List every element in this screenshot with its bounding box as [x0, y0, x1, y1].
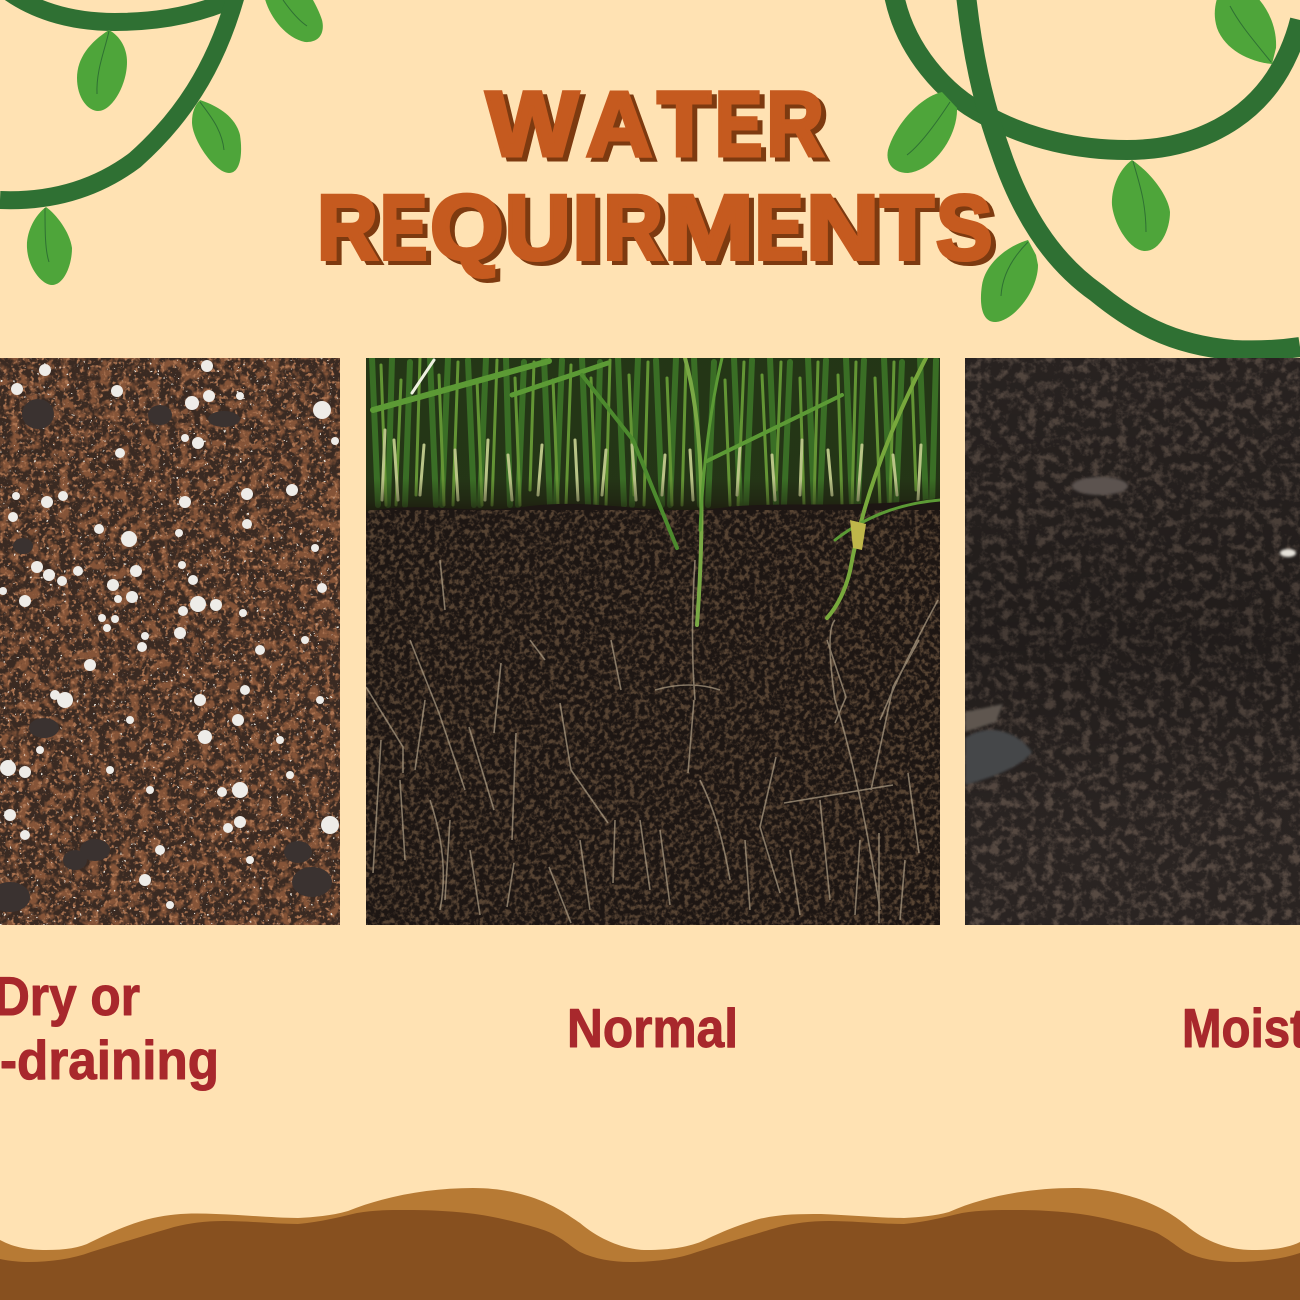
title: E	[720, 78, 767, 180]
title: T	[662, 78, 716, 180]
title: E	[760, 181, 808, 283]
title: T	[657, 74, 711, 176]
title: U	[510, 181, 576, 283]
title: Q	[430, 177, 504, 279]
title: S	[936, 177, 992, 279]
title: R	[766, 74, 824, 176]
perlite pieces	[0, 360, 339, 909]
vine: top right	[887, 0, 1300, 350]
leaves: top left	[27, 0, 323, 285]
title: W	[491, 78, 584, 180]
title: U	[505, 177, 571, 279]
title: E	[380, 177, 427, 279]
yellow leaf	[850, 520, 866, 550]
grass	[366, 358, 940, 513]
title: E	[755, 177, 803, 279]
title: N	[811, 181, 884, 283]
photo: normal soil with grass	[366, 358, 940, 925]
title: M	[663, 177, 754, 279]
grass stems and long blades	[373, 358, 940, 625]
photo: dry well-draining soil	[0, 358, 340, 925]
title: R	[603, 177, 663, 279]
stones	[965, 477, 1296, 785]
title: A	[591, 78, 657, 180]
title: W	[486, 74, 579, 176]
title: I	[577, 181, 605, 283]
title: S	[941, 181, 998, 283]
title: A	[586, 74, 652, 176]
vine: top left	[0, 0, 323, 285]
title: N	[806, 177, 879, 279]
dark stones	[0, 399, 332, 912]
ground: dark soil layer	[0, 1210, 1300, 1300]
roots	[366, 560, 938, 923]
labels	[0, 965, 1300, 1091]
title: R	[608, 181, 668, 283]
labels: Normal	[567, 997, 738, 1059]
title: R	[771, 78, 829, 180]
title: R	[322, 181, 383, 283]
title: Q	[435, 181, 509, 283]
title: E	[715, 74, 762, 176]
labels: -draining	[0, 1029, 219, 1091]
title: M	[668, 181, 759, 283]
title: E	[385, 181, 432, 283]
title: T	[885, 181, 939, 283]
ground: light soil layer	[0, 1188, 1300, 1300]
soil body	[380, 498, 940, 510]
photo: moist soil	[965, 358, 1300, 925]
title: R	[317, 177, 378, 279]
title: I	[572, 177, 600, 279]
title	[317, 74, 998, 283]
leaves: top right	[887, 0, 1276, 322]
title: T	[880, 177, 934, 279]
